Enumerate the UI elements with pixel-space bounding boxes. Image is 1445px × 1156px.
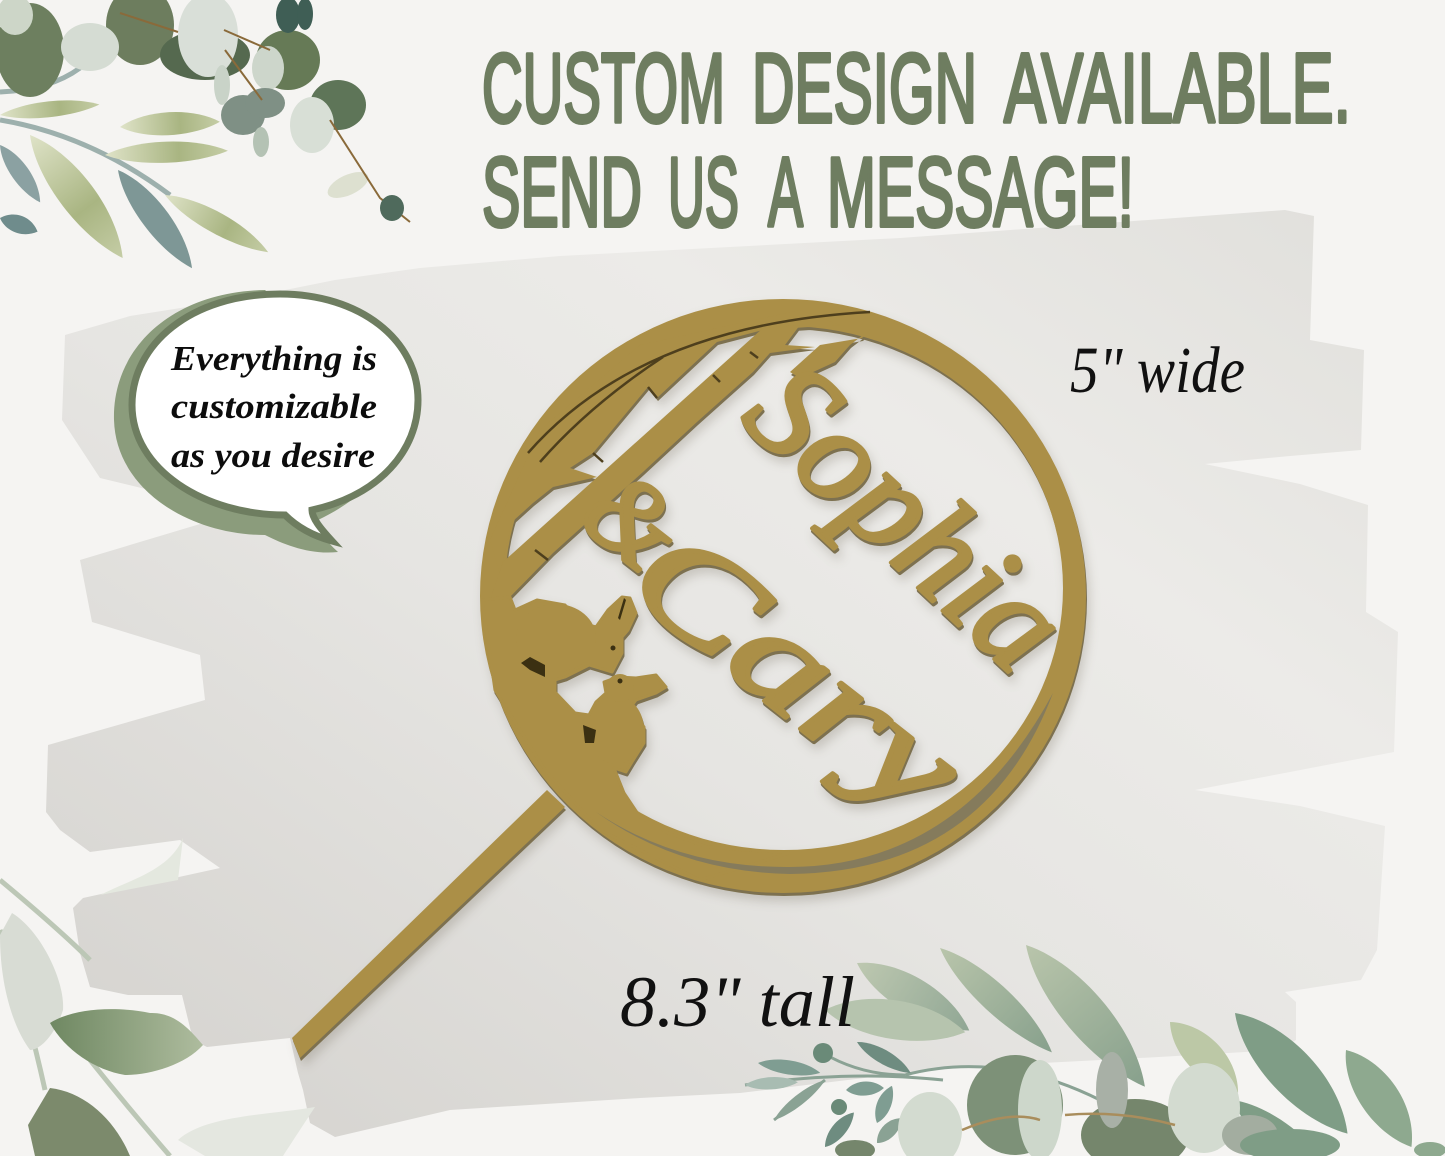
headline [482, 33, 1351, 247]
foliage top left [0, 0, 410, 276]
bubble text [170, 339, 377, 475]
cake topper [292, 299, 1096, 1058]
top left corner panel [490, 310, 840, 575]
bubble shadow [114, 290, 401, 553]
animals and base [482, 597, 790, 880]
bubble text: customizable [171, 387, 377, 426]
foliage bottom left [0, 838, 315, 1156]
headline: MESSAGE! [827, 137, 1134, 247]
foliage bottom right [745, 931, 1445, 1156]
width label: 5" wide [1070, 334, 1245, 407]
lower dark leaf [28, 1088, 130, 1156]
bubble body [132, 294, 418, 541]
rabbit body [516, 604, 596, 672]
top flourish [790, 328, 872, 378]
names [560, 333, 1096, 845]
bubble text: Everything is [170, 339, 377, 378]
topper stick [292, 790, 565, 1058]
duck body [588, 696, 644, 764]
headline: A [768, 137, 803, 247]
pale upper leaf [100, 838, 183, 895]
headline: CUSTOM [482, 33, 725, 143]
names: & [560, 444, 705, 595]
names: Cary [604, 496, 991, 845]
headline: US [668, 137, 739, 247]
pale lower leaf [178, 1107, 315, 1156]
bubble text: as you desire [171, 436, 375, 475]
height label: 8.3" tall [620, 962, 855, 1042]
diagonal strip [490, 325, 815, 600]
duck head [606, 674, 634, 702]
outer ring [480, 299, 1086, 893]
headline: DESIGN [752, 33, 977, 143]
headline: SEND [482, 137, 642, 247]
painted brush background [46, 210, 1398, 1137]
speech bubble [114, 290, 418, 553]
pale side leaf [0, 913, 63, 1050]
names: Sophia [718, 333, 1096, 700]
ring slits [528, 312, 870, 560]
dark leaf [50, 1009, 203, 1075]
bottom ring gap [596, 693, 1053, 874]
animal details [521, 598, 626, 743]
